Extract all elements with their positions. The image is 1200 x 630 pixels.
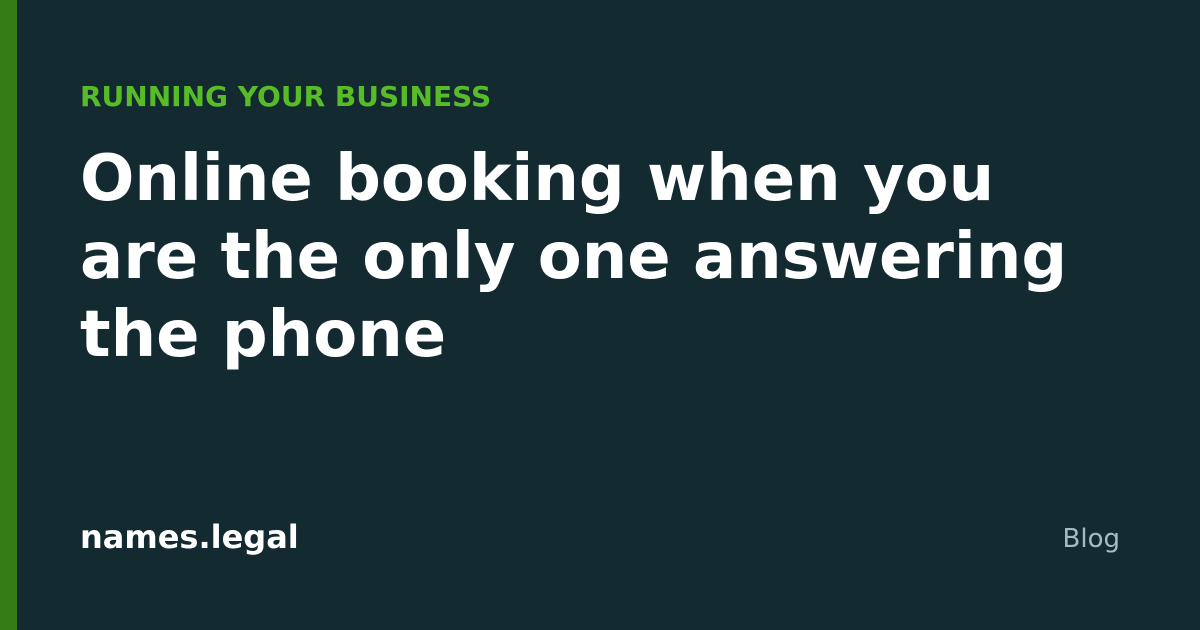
section label: Blog: [1063, 524, 1120, 554]
accent bar: [0, 0, 17, 630]
eyebrow category label: RUNNING YOUR BUSINESS: [80, 80, 491, 113]
title: Online booking when you: [80, 142, 994, 216]
title: [80, 142, 1067, 372]
title: the phone: [80, 298, 446, 372]
brand name: names.legal: [80, 518, 299, 556]
title: are the only one answering: [80, 220, 1067, 294]
